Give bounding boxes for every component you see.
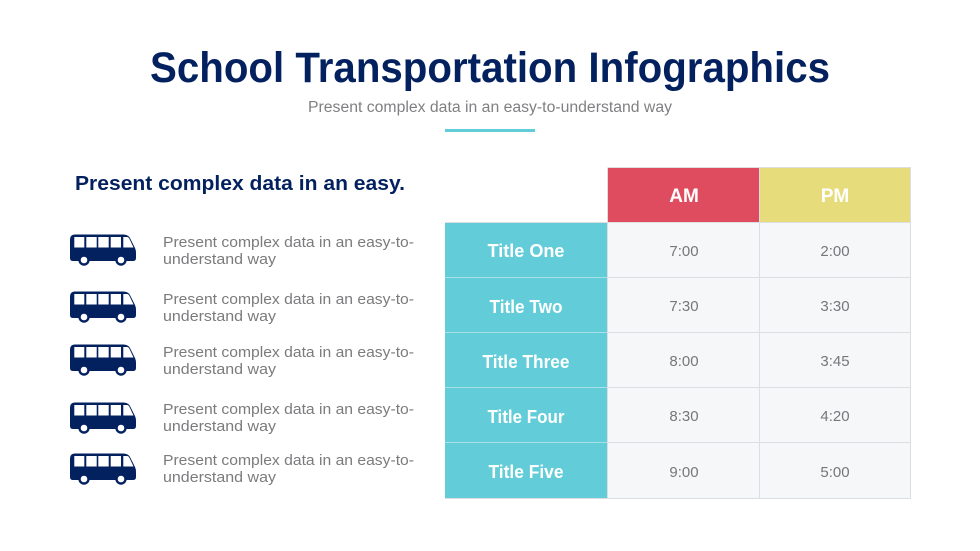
row title column bbox=[445, 223, 607, 498]
times grid: 7:30 bbox=[669, 298, 699, 315]
row title column: Title Three bbox=[482, 351, 570, 372]
list item 5 bbox=[70, 452, 414, 486]
list item 4: understand way bbox=[163, 418, 277, 435]
list item 4 bbox=[70, 401, 414, 435]
times grid: 3:30 bbox=[820, 298, 850, 315]
times grid: 4:20 bbox=[820, 408, 850, 425]
subtitle: Present complex data in an easy-to-understand way bbox=[308, 99, 672, 116]
row title column: Title Four bbox=[488, 406, 564, 427]
row title column: Title One bbox=[488, 240, 564, 261]
title underline accent bbox=[445, 129, 535, 132]
list item 2 bbox=[70, 291, 414, 325]
times grid: 8:00 bbox=[669, 353, 699, 370]
times grid: 7:00 bbox=[669, 243, 699, 260]
list item 3 bbox=[70, 344, 414, 378]
title: School Transportation Infographics bbox=[150, 44, 830, 92]
times grid: 2:00 bbox=[820, 243, 850, 260]
times grid: 3:45 bbox=[820, 353, 850, 370]
panel: bus list bbox=[70, 234, 414, 486]
header: AM bbox=[608, 168, 760, 222]
list item 2: understand way bbox=[163, 308, 277, 325]
list item 5: understand way bbox=[163, 469, 277, 486]
times grid: 9:00 bbox=[669, 464, 699, 481]
list item 1: understand way bbox=[163, 251, 277, 268]
header: PM: PM bbox=[821, 186, 849, 207]
times grid: 5:00 bbox=[820, 464, 850, 481]
list item 3: understand way bbox=[163, 361, 277, 378]
list item 1: Present complex data in an easy-to- bbox=[163, 234, 414, 251]
header: PM bbox=[760, 168, 910, 222]
list item 5: Present complex data in an easy-to- bbox=[163, 452, 414, 469]
row title column: Title Two bbox=[490, 296, 562, 317]
list item 3: Present complex data in an easy-to- bbox=[163, 344, 414, 361]
times grid: 8:30 bbox=[669, 408, 699, 425]
header: AM: AM bbox=[669, 186, 699, 207]
row title column: Title Five bbox=[488, 461, 564, 482]
schedule table bbox=[445, 168, 911, 499]
list item 1 bbox=[70, 234, 414, 268]
list item 4: Present complex data in an easy-to- bbox=[163, 401, 414, 418]
list item 2: Present complex data in an easy-to- bbox=[163, 291, 414, 308]
times grid bbox=[445, 168, 911, 499]
left heading: Present complex data in an easy. bbox=[75, 173, 405, 195]
